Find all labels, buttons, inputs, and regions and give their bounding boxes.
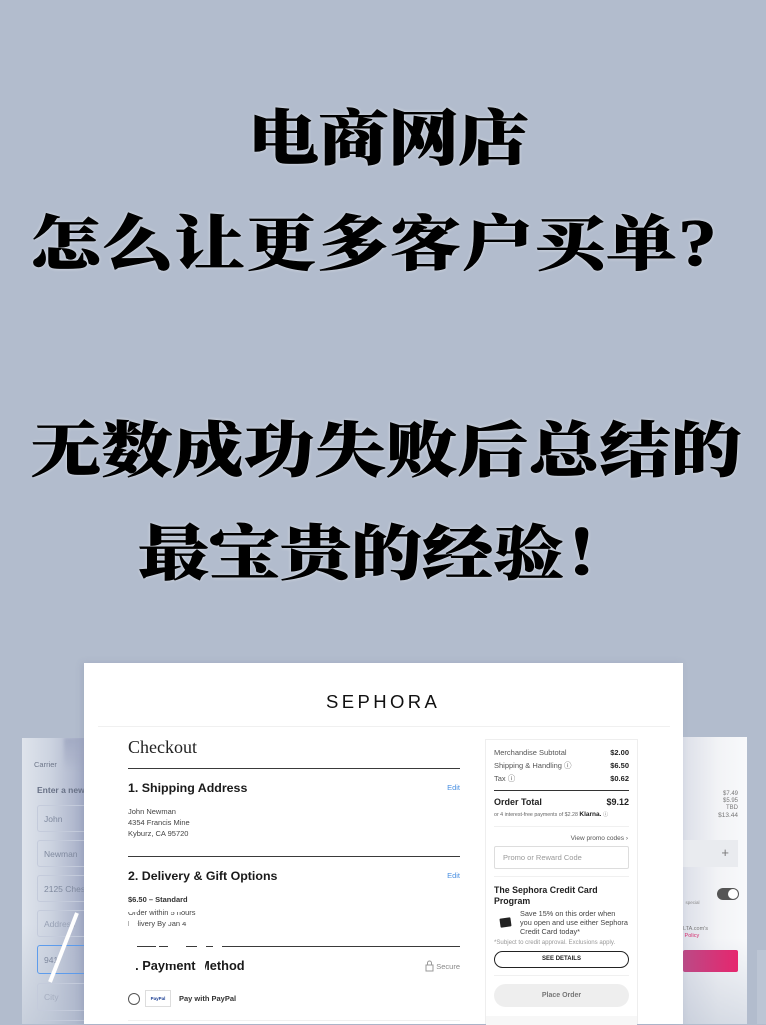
panel: faint far-right sheet xyxy=(757,950,766,1024)
address text xyxy=(128,807,190,838)
place order button: Place Order xyxy=(542,992,581,999)
see details button xyxy=(494,950,629,968)
logo: Sephora: SEPHORA xyxy=(326,691,440,712)
promo link: View promo codes › xyxy=(571,835,628,842)
PayPal badge: PayPal xyxy=(151,996,165,1001)
policy link: Policy xyxy=(685,933,699,939)
heading: 2. Delivery & Gift Options xyxy=(128,869,277,883)
subtitle line 2: 最宝贵的经验！ xyxy=(138,522,635,588)
place order button xyxy=(494,984,629,1007)
form fields: Newman xyxy=(44,849,78,859)
price list: $7.49 xyxy=(723,791,738,797)
panel: order summary xyxy=(485,739,638,1024)
address text: John Newman xyxy=(128,807,176,816)
line items: Tax ⓘ xyxy=(494,774,515,783)
secure lock icon xyxy=(426,960,434,972)
price list xyxy=(718,790,738,819)
credit card offer: you open and use either Sephora xyxy=(520,918,628,927)
line items: $2.00 xyxy=(610,748,629,756)
heading: 1. Shipping Address xyxy=(128,781,247,795)
title: main headline line 2: 怎么让更多客户买单? xyxy=(30,206,718,280)
form fields xyxy=(37,805,84,1021)
line items xyxy=(494,748,629,783)
title: main headline line 1: 电商网店 xyxy=(248,107,528,173)
erased rule gaps xyxy=(128,944,222,948)
form fields: Address xyxy=(44,919,75,929)
secure label: Secure xyxy=(436,962,460,971)
form fields: 2125 Ches xyxy=(44,884,84,894)
credit card title: Program xyxy=(494,896,530,906)
delivery note: Delivery By Jan 4 xyxy=(128,919,186,928)
radio button xyxy=(128,993,140,1005)
card icon xyxy=(499,917,512,928)
section: payment method xyxy=(128,958,460,1007)
price list: $5.95 xyxy=(723,798,738,804)
see details button: SEE DETAILS xyxy=(542,956,581,962)
panel: Sephora checkout card xyxy=(84,663,683,1024)
shipping method: $6.50 – Standard xyxy=(128,895,188,904)
price list: $13.44 xyxy=(718,812,738,819)
address text: 4354 Francis Mine xyxy=(128,818,190,827)
section heading: Checkout: Checkout xyxy=(128,737,197,757)
heading: 3. Payment Method xyxy=(128,958,245,973)
credit card offer: Credit Card today* xyxy=(520,927,580,936)
policy link xyxy=(683,926,708,939)
toggle xyxy=(717,888,739,900)
address text: Kyburz, CA 95720 xyxy=(128,829,188,838)
credit card title xyxy=(494,885,598,906)
PayPal label: Pay with PayPal xyxy=(179,994,236,1003)
delivery note xyxy=(128,908,196,928)
plus row: + xyxy=(721,845,729,860)
form fields: 941 xyxy=(44,955,58,965)
small note: special xyxy=(686,900,700,905)
subtitle line 1: 无数成功失败后总结的 xyxy=(30,419,742,485)
form fields: John xyxy=(44,814,62,824)
footer band xyxy=(486,1016,637,1025)
form fields: City xyxy=(44,992,59,1002)
carrier status: Carrier xyxy=(34,760,57,769)
order total: $9.12 xyxy=(606,797,629,807)
panel: left phone form screenshot xyxy=(22,738,86,1024)
edit link: Edit xyxy=(447,871,460,880)
price list: TBD xyxy=(726,805,738,811)
klarna note: or 4 interest-free payments of $2.28 Klarna. ⓘ xyxy=(494,811,608,818)
policy link: LTA.com's xyxy=(683,926,708,932)
line items: $0.62 xyxy=(610,774,629,783)
line items: Shipping & Handling ⓘ xyxy=(494,761,572,770)
pink checkout button xyxy=(683,950,738,972)
plus row xyxy=(683,840,738,867)
promo input xyxy=(494,846,629,869)
torn top smudge xyxy=(64,738,86,770)
section: delivery and gift options xyxy=(128,869,460,928)
line items: Merchandise Subtotal xyxy=(494,748,567,756)
decorative white slash xyxy=(48,912,79,983)
PayPal badge xyxy=(145,990,171,1007)
credit card offer xyxy=(520,909,628,936)
edit link: Edit xyxy=(447,783,460,792)
line items: $6.50 xyxy=(610,761,629,770)
credit card offer: Save 15% on this order when xyxy=(520,909,615,918)
section: shipping address xyxy=(128,781,460,838)
panel: right cart screenshot xyxy=(683,737,747,1024)
heading: enter a new address: Enter a new xyxy=(37,785,84,795)
order total xyxy=(494,797,629,807)
promo input: Promo or Reward Code xyxy=(503,853,582,862)
disclaimer: *Subject to credit approval. Exclusions apply. xyxy=(494,939,615,946)
delivery note: Order within 5 hours xyxy=(128,908,196,917)
order total: Order Total xyxy=(494,797,542,807)
credit card title: The Sephora Credit Card xyxy=(494,885,598,895)
